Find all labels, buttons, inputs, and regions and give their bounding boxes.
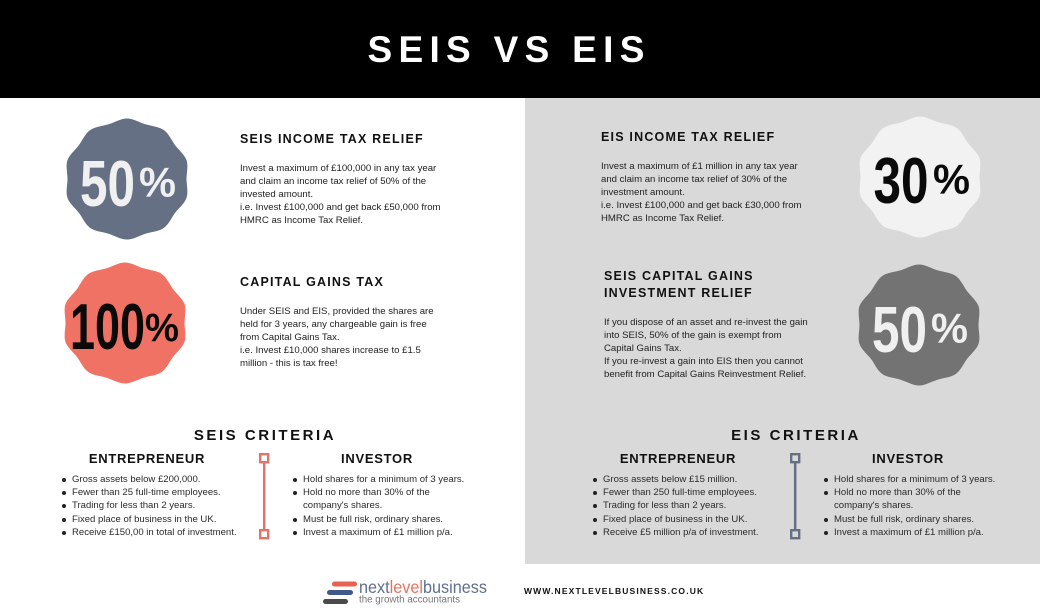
- text: SEIS income tax relief: invested amount.: [240, 189, 313, 200]
- text: capital gains tax: i.e. Invest £10,000 shares increase to £1.5: [240, 345, 421, 356]
- heading: SEIS capital gains investment relief: SEIS CAPITAL GAINS: [604, 269, 754, 283]
- list: EIS investor criteria: Hold no more than 30% of the: [834, 487, 961, 498]
- heading: EIS entrepreneur: ENTREPRENEUR: [620, 451, 736, 466]
- text: capital gains tax: [240, 306, 434, 369]
- list: SEIS entrepreneur criteria: Trading for less than 2 years.: [72, 500, 195, 511]
- text: EIS income tax relief: investment amount.: [601, 187, 685, 198]
- website URL: WWW.NEXTLEVELBUSINESS.CO.UK: [524, 586, 704, 596]
- badge: EIS 30%: %: [933, 156, 970, 202]
- badge: EIS 30%: 30: [874, 144, 928, 217]
- list: SEIS investor criteria: Invest a maximum of £1 million p/a.: [303, 527, 453, 538]
- list: SEIS entrepreneur criteria: Gross assets below £200,000.: [72, 474, 200, 485]
- list: SEIS entrepreneur criteria: Receive £150,00 in total of investment.: [72, 527, 237, 538]
- heading: capital gains tax: CAPITAL GAINS TAX: [240, 275, 384, 289]
- list: EIS investor criteria: Hold shares for a minimum of 3 years.: [834, 474, 995, 485]
- list: SEIS entrepreneur criteria: Fixed place of business in the UK.: [72, 514, 216, 525]
- list: SEIS entrepreneur criteria: [62, 474, 237, 538]
- list: EIS investor criteria: Invest a maximum of £1 million p/a.: [834, 527, 984, 538]
- heading: EIS investor: INVESTOR: [872, 451, 944, 466]
- badge: EIS side 50%: %: [931, 304, 968, 352]
- title banner: SEIS VS EIS: [368, 29, 651, 70]
- list: EIS entrepreneur criteria: Receive £5 million p/a of investment.: [603, 527, 758, 538]
- text: SEIS income tax relief: and claim an income tax relief of 50% of the: [240, 176, 426, 187]
- heading: EIS criteria: EIS CRITERIA: [731, 427, 861, 444]
- badge: capital gains 100%: 100: [70, 290, 145, 363]
- heading: SEIS income tax relief: SEIS INCOME TAX RELIEF: [240, 132, 424, 146]
- list: SEIS investor criteria: [293, 474, 464, 538]
- text: SEIS capital gains investment relief: Capital Gains Tax.: [604, 343, 682, 354]
- list: EIS entrepreneur criteria: [593, 474, 758, 538]
- list: EIS investor criteria: Must be full risk, ordinary shares.: [834, 514, 974, 525]
- text: SEIS capital gains investment relief: If you dispose of an asset and re-invest the gain: [604, 317, 808, 328]
- panel: EIS grey background: [525, 98, 1040, 564]
- text: EIS income tax relief: HMRC as Income Tax Relief.: [601, 213, 724, 224]
- text: capital gains tax: Under SEIS and EIS, provided the shares are: [240, 306, 434, 317]
- logo: Next Level Business: the growth accountants: [359, 594, 460, 606]
- list: EIS entrepreneur criteria: Trading for less than 2 years.: [603, 500, 726, 511]
- text: EIS income tax relief: Invest a maximum of £1 million in any tax year: [601, 161, 798, 172]
- badge: capital gains 100%: %: [145, 306, 179, 350]
- heading: SEIS investor: INVESTOR: [341, 451, 413, 466]
- list: SEIS investor criteria: company's shares.: [303, 500, 382, 511]
- text: EIS income tax relief: [601, 161, 802, 224]
- heading: SEIS capital gains investment relief: [604, 269, 754, 300]
- heading: SEIS capital gains investment relief: INVESTMENT RELIEF: [604, 286, 753, 300]
- text: capital gains tax: million - this is tax free!: [240, 358, 338, 369]
- text: SEIS capital gains investment relief: benefit from Capital Gains Reinvestment Relief.: [604, 369, 806, 380]
- list: EIS entrepreneur criteria: Gross assets below £15 million.: [603, 474, 737, 485]
- text: SEIS income tax relief: i.e. Invest £100,000 and get back £50,000 from: [240, 202, 441, 213]
- text: SEIS income tax relief: [240, 163, 441, 226]
- text: capital gains tax: from Capital Gains Tax.: [240, 332, 340, 343]
- logo: Next Level Business: nextlevelbusiness: [359, 577, 487, 597]
- list: SEIS investor criteria: Must be full risk, ordinary shares.: [303, 514, 443, 525]
- heading: SEIS criteria: SEIS CRITERIA: [194, 427, 336, 444]
- heading: SEIS entrepreneur: ENTREPRENEUR: [89, 451, 205, 466]
- list: EIS investor criteria: [824, 474, 995, 538]
- badge: EIS side 50%: 50: [872, 293, 927, 366]
- heading: EIS income tax relief: EIS INCOME TAX RELIEF: [601, 130, 775, 144]
- list: SEIS investor criteria: Hold no more than 30% of the: [303, 487, 430, 498]
- list: SEIS entrepreneur criteria: Fewer than 25 full-time employees.: [72, 487, 221, 498]
- text: SEIS income tax relief: Invest a maximum of £100,000 in any tax year: [240, 163, 436, 174]
- list: EIS investor criteria: company's shares.: [834, 500, 913, 511]
- text: SEIS income tax relief: HMRC as Income Tax Relief.: [240, 215, 363, 226]
- text: SEIS capital gains investment relief: [604, 317, 808, 380]
- text: capital gains tax: held for 3 years, any chargeable gain is free: [240, 319, 427, 330]
- list: SEIS investor criteria: Hold shares for a minimum of 3 years.: [303, 474, 464, 485]
- text: EIS income tax relief: and claim an income tax relief of 30% of the: [601, 174, 787, 185]
- badge: SEIS 50%: 50: [80, 147, 135, 220]
- list: EIS entrepreneur criteria: Fixed place of business in the UK.: [603, 514, 747, 525]
- text: SEIS capital gains investment relief: into SEIS, 50% of the gain is exempt from: [604, 330, 782, 341]
- text: SEIS capital gains investment relief: If you re-invest a gain into EIS then you cannot: [604, 356, 803, 367]
- title banner: [0, 0, 1040, 98]
- text: EIS income tax relief: i.e. Invest £100,000 and get back £30,000 from: [601, 200, 802, 211]
- list: EIS entrepreneur criteria: Fewer than 250 full-time employees.: [603, 487, 757, 498]
- badge: SEIS 50%: %: [139, 158, 176, 206]
